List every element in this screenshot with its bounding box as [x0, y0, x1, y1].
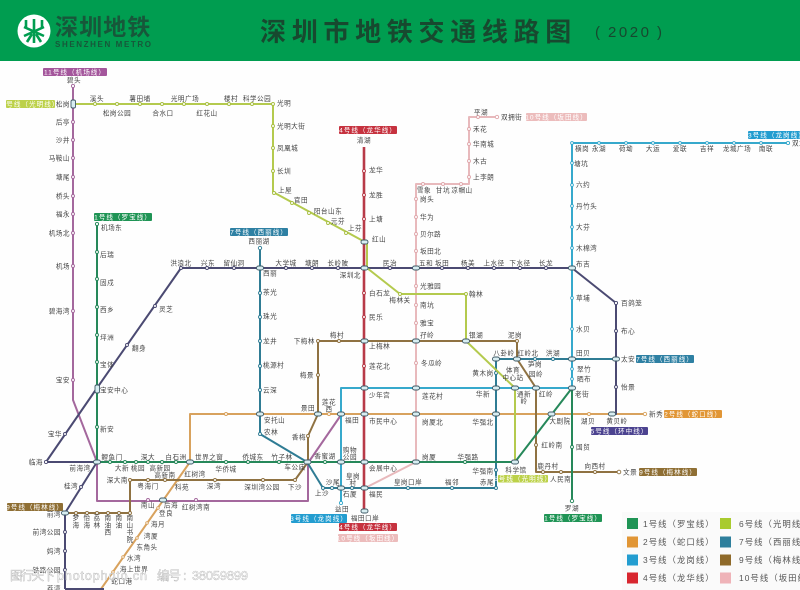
station names: centre: 民乐 [369, 312, 383, 322]
line tag: 11: 11号线（机场线） [44, 68, 106, 76]
line tag: 3 south: 3号线（龙岗线） [290, 514, 348, 523]
station names: east: 布心 [621, 326, 635, 336]
station names: centre: 岗厦 [422, 454, 436, 462]
station names: centre: 白石龙 [369, 288, 390, 298]
station names: centre: 坂田北 [420, 246, 441, 256]
station names: west: 后亭 [56, 118, 70, 126]
station names: centre: 益田 [335, 504, 349, 514]
station names: west: 宝华 [48, 430, 62, 438]
line 1 Luobao [95, 222, 574, 503]
year: 2020 [608, 24, 649, 41]
station names: centre: 西丽 [263, 270, 277, 278]
station names: east: 洪湖 [546, 348, 560, 358]
station names: east: 六约 [576, 180, 590, 189]
station names: west: 翻身 [132, 344, 146, 352]
station names: east: 中心站 [502, 373, 524, 382]
station names: east: 新秀 [649, 410, 663, 418]
line tag: 1: 1号线（罗宝线） [94, 212, 152, 222]
watermark [10, 568, 248, 583]
station names: east: 永湖 [592, 144, 606, 153]
station names: west: 大新 [115, 464, 129, 472]
line tag: 9 west: 9号线（梅林线） [6, 502, 64, 512]
station names: centre: 西 [325, 406, 333, 414]
line tag: 10 south: 10号线（坂田线） [337, 534, 399, 542]
station names: line 6 north: 光明广场 [171, 94, 199, 103]
station names: centre: 上李朗 [473, 172, 494, 182]
line 7 Xili [258, 246, 616, 490]
station names: centre: 华强路 [457, 452, 479, 462]
year: ) [657, 24, 662, 41]
line tag: 4 south: 4号线（龙华线） [339, 522, 397, 532]
station names: west: 梦 [72, 514, 80, 522]
station names: west: 蛇口港 [111, 576, 133, 586]
station names: west: 鲤鱼门 [101, 452, 123, 462]
station names: east: 黄贝岭 [606, 416, 628, 426]
station names: west: 东角头 [136, 542, 158, 552]
station names: east: 泥岗 [508, 332, 522, 340]
station names: centre: 赤尾 [480, 478, 494, 486]
station names: centre: 雪象 [417, 186, 431, 194]
station names: east: 老街 [575, 390, 589, 398]
station names: line 6 north: 光明大街 [277, 122, 305, 130]
station names: line 6 north: 元芬 [331, 216, 345, 226]
station names: centre: 上塘 [369, 214, 383, 224]
station names: west: 南 [104, 513, 112, 522]
station names: east: 八卦岭 [493, 348, 515, 358]
station names: west: 海上世界 [120, 564, 148, 574]
station names: centre: 甘坑 [436, 186, 450, 194]
station names: centre: 农林 [264, 428, 278, 436]
station names: centre: 长岭陂 [327, 258, 349, 268]
station names: line 6 north: 科学公园 [243, 94, 271, 103]
line 9 Meilin [65, 340, 621, 514]
station names: centre: 凉帽山 [451, 186, 473, 194]
station names: west: 前海湾 [69, 464, 91, 472]
line tag: 6 south: 6号线（光明线） [494, 474, 552, 483]
station names: centre: 岗厦北 [422, 418, 443, 426]
station names: centre: 孖岭 [420, 330, 434, 340]
station names: centre: 华强南 [472, 466, 494, 476]
station names: east: 国贸 [576, 442, 590, 452]
station names: line 6 north: 翰林 [469, 290, 483, 298]
station names: east: 人民南 [550, 474, 571, 484]
station names: centre: 双拥街 [501, 112, 522, 122]
station names: west: 临海 [29, 458, 43, 466]
station names: west: 水湾 [127, 554, 141, 562]
station names: east: 向西村 [584, 462, 606, 470]
line tag: 4: 4号线（龙华线） [339, 126, 397, 134]
station names: west: 竹子林 [271, 452, 293, 462]
station names: line 6 north: 阳台山东 [314, 206, 342, 216]
station names: line 6 north: 官田 [294, 196, 308, 204]
line 5 Huanzhong [44, 266, 618, 589]
station names: east: 塘坑 [574, 159, 588, 168]
station names: east: 大芬 [576, 222, 590, 232]
station names: west: 粤海门 [137, 482, 159, 490]
station names: east: 晒布 [577, 374, 591, 384]
station names: line 6 north: 薯田埔 [129, 94, 151, 103]
station names: west: 深圳湾公园 [244, 482, 280, 492]
station names: line 6 north: 溪头 [90, 94, 104, 103]
station names: west: 松岗 [56, 100, 70, 108]
station names: west: 红树湾南 [182, 502, 210, 512]
station names: centre: 华南城 [473, 140, 494, 148]
station names: centre: 云深 [263, 386, 277, 394]
station names: east: 丹竹头 [576, 202, 597, 210]
station names: centre: 下水径 [509, 258, 531, 268]
legend: 1号线（罗宝线） [643, 519, 715, 529]
station names: west: 马鞍山 [49, 154, 70, 162]
station names: west: 湾厦 [144, 532, 158, 540]
station names: west: 海 [72, 520, 80, 529]
station names: west: 宝安中心 [100, 386, 128, 394]
legend: 4号线（龙华线） [643, 573, 715, 583]
station names: centre: 贝尔路 [420, 230, 441, 238]
line tag: 2: 2号线（蛇口线） [664, 410, 722, 418]
station names: west: 坪洲 [100, 334, 114, 342]
station names: west: 塘尾 [56, 172, 70, 182]
station names: centre: 清湖 [357, 136, 371, 144]
legend: 3号线（龙岗线） [643, 555, 715, 565]
watermark: photophoto.cn [57, 569, 147, 583]
station names: west: 机场东 [101, 223, 122, 232]
station names: east: 红岭 [539, 390, 553, 398]
station names: centre: 景田 [301, 404, 315, 412]
station names: west: 固戍 [100, 278, 114, 287]
station names: east: 木棉湾 [576, 244, 597, 252]
station names: west: 新安 [100, 424, 114, 434]
station names: centre: 冬瓜岭 [421, 358, 442, 368]
station names: centre: 车公庙 [284, 462, 306, 472]
station names: east: 大运 [646, 144, 660, 153]
station names: line 6 north: 光明 [277, 98, 291, 108]
station names: west: 油 [104, 520, 112, 529]
line tag: 6: 6号线（光明线） [2, 100, 59, 108]
station names: west [29, 76, 293, 590]
station names: centre: 华新 [476, 390, 490, 398]
station names: line 6 north: 凤凰城 [277, 144, 298, 152]
station names: centre: 福田口岸 [351, 514, 379, 522]
station names: centre: 莲花 [322, 398, 336, 406]
station names: line 6 north [90, 94, 483, 340]
logo wordmark: SHENZHEN METRO [55, 40, 151, 49]
station names: west: 院 [126, 535, 134, 544]
station names: centre: 福民 [369, 490, 383, 498]
station names: line 6 north: 上屋 [278, 186, 292, 194]
station names: west: 桃园 [131, 464, 145, 472]
header banner [0, 0, 800, 61]
station names: west: 前湾 [47, 510, 61, 518]
station names: east: 岭 [520, 396, 528, 406]
station names: centre: 下梅林 [294, 336, 315, 346]
station names: west: 南 [126, 513, 134, 522]
station names: centre: 洪浪北 [170, 258, 192, 268]
station names: centre: 华为 [420, 212, 434, 222]
station names: west: 科苑 [175, 482, 189, 492]
station names: line 6 north: 红山 [372, 234, 386, 244]
station names: east: 太安 [621, 354, 635, 364]
station names: west: 沙井 [56, 136, 70, 144]
station names: centre: 沙尾 [326, 478, 340, 486]
station names: centre: 西丽湖 [248, 236, 270, 246]
station names: centre: 上水径 [483, 258, 505, 268]
station names: west: 海月 [151, 520, 165, 528]
station names: centre: 桃源村 [263, 360, 284, 370]
station names: east: 通新 [517, 390, 531, 398]
watermark: : [183, 569, 186, 583]
station names: line 6 north: 楼村 [224, 94, 238, 103]
station names: east: 田贝 [576, 350, 590, 358]
station names: centre: 少年宫 [369, 390, 390, 400]
line 3 Longgang [339, 141, 790, 505]
station names: centre: 岗头 [420, 194, 434, 204]
station names: east: 湖贝 [581, 416, 595, 426]
station names: west: 福永 [56, 210, 70, 218]
logo wordmark: 深圳地铁 [55, 14, 151, 40]
station names: east: 水贝 [576, 324, 590, 334]
station names: centre: 华强北 [472, 418, 494, 426]
line tag: 7: 7号线（西丽线） [230, 228, 288, 236]
station names: line 6 north: 长圳 [277, 166, 291, 176]
station names: west: 桥头 [56, 192, 70, 200]
station names: line 6 north: 松岗公园 [103, 108, 131, 118]
station names: centre: 雅宝 [420, 318, 434, 328]
station names: west: 机场北 [49, 228, 70, 238]
station names: west: 侨城东 [242, 452, 264, 462]
station names: west: 碧头 [67, 76, 81, 84]
station names: centre: 光雅园 [420, 282, 441, 290]
station names: west: 高新南 [154, 470, 176, 480]
station names: west: 深大 [141, 452, 155, 462]
station names: centre: 莲花北 [369, 362, 390, 370]
line 10 Bantian [365, 115, 499, 488]
station names: centre: 香梅 [292, 432, 306, 442]
line tag: 9 east: 9号线（梅林线） [639, 468, 697, 476]
station names: centre: 木古 [473, 156, 487, 166]
station names: west: 南 [115, 513, 123, 522]
legend [622, 512, 800, 590]
station names: centre: 留仙洞 [223, 258, 245, 268]
watermark: 图行天下 [10, 569, 55, 583]
station names: east: 龙城广场 [723, 144, 751, 153]
watermark: 38059899 [192, 569, 248, 583]
station names: east: 吉祥 [700, 144, 714, 153]
station names: west: 林 [93, 520, 101, 529]
station names: west: 前湾公园 [33, 528, 61, 536]
station names: line 6 north: 合水口 [152, 108, 174, 118]
station names: centre: 长龙 [539, 258, 553, 268]
station names: west: 登良 [159, 508, 173, 518]
station names: west: 白石洲 [165, 452, 187, 462]
station names: east: 横岗 [575, 144, 589, 153]
station names: east: 翠竹 [577, 364, 591, 374]
station names: centre: 安托山 [264, 416, 285, 424]
station names: west: 后瑞 [100, 250, 114, 259]
station names: centre: 珠光 [263, 312, 277, 320]
station names: centre: 杨美 [461, 258, 475, 268]
station names: centre: 香蜜湖 [314, 452, 336, 460]
station names: west: 宝安 [56, 376, 70, 384]
station names: line 6 north: 梅林关 [389, 296, 411, 304]
line 4 Longhua [362, 147, 366, 511]
station names: east: 百鸽笼 [621, 298, 642, 308]
station names: east: 园岭 [529, 370, 543, 378]
station names: east: 鹿丹村 [537, 462, 559, 470]
station names: centre: 村 [349, 478, 357, 488]
station names: east: 体育 [506, 366, 520, 374]
station names: centre: 福邻 [445, 478, 459, 486]
station names: west: 深大南 [107, 476, 128, 484]
station names: west: 世界之窗 [195, 452, 223, 462]
watermark: 编号 [157, 568, 181, 583]
station names: centre: 大学城 [275, 258, 297, 268]
station names: west: 灵芝 [159, 304, 173, 314]
line 6 Guangming [73, 102, 515, 462]
station names: centre: 禾花 [473, 124, 487, 134]
station names: west: 深湾 [207, 482, 221, 490]
station names: east: 怡景 [621, 382, 635, 392]
station names: centre: 茶光 [263, 288, 277, 296]
station names: centre: 平湖 [474, 108, 488, 116]
station names: west: 怡 [83, 513, 91, 522]
station names: west: 红树湾 [184, 470, 206, 478]
station names: east: 笋岗 [528, 360, 542, 368]
station names: west: 山 [126, 520, 134, 529]
station names: east: 爱联 [673, 144, 687, 153]
station names: west: 后海 [164, 500, 178, 510]
station names: centre: 会展中心 [369, 464, 397, 472]
station names: east [493, 138, 800, 512]
station names: west: 海 [83, 520, 91, 529]
line tag: 5: 5号线（环中线） [591, 426, 648, 436]
station names: centre: 公园 [343, 454, 357, 462]
station names: east: 大剧院 [549, 416, 571, 426]
icon: metro logo [18, 14, 50, 48]
line 2 Shekou [101, 412, 647, 589]
station names: west: 桂湾 [64, 482, 78, 490]
station names: west: 妈湾 [47, 546, 61, 556]
station names: west: 油 [115, 520, 123, 529]
station names: east: 红岭南 [541, 440, 563, 450]
line 11 Airport [71, 84, 341, 502]
station names: centre: 皇岗 [346, 472, 360, 480]
station names: line 6 north: 红花山 [196, 108, 218, 118]
station names: centre: 深圳北 [340, 270, 361, 280]
station names: west: 书 [126, 528, 134, 537]
station names: centre: 兴东 [201, 258, 215, 268]
station names: west: 铁路公园 [33, 566, 61, 574]
station names: centre: 黄木岗 [472, 368, 494, 378]
station names: west: 西 [104, 529, 112, 537]
station names: centre: 上沙 [315, 488, 329, 498]
station names: west: 机场 [56, 262, 70, 270]
station names: centre: 福田 [345, 416, 359, 424]
title: 深圳市地铁交通线路图 [260, 17, 577, 47]
station names: centre: 南坑 [420, 300, 434, 310]
station names: centre: 皇岗口岸 [394, 478, 422, 486]
station names: east: 南联 [759, 144, 773, 153]
station names: centre: 民治 [383, 258, 397, 268]
year [595, 24, 662, 41]
station names: centre: 市民中心 [369, 416, 397, 426]
station names: west: 宝体 [100, 360, 114, 369]
station names: centre: 莲花村 [422, 392, 443, 400]
station names: centre: 购物 [343, 446, 357, 454]
station names: centre: 坂田 [435, 258, 449, 268]
station names: centre: 梅村 [330, 330, 344, 340]
station names: west: 高新园 [149, 464, 171, 472]
station names: east: 文景 [623, 468, 637, 476]
station names: west: 南山 [141, 500, 155, 510]
station names: east: 红岭北 [517, 348, 539, 358]
station names: east: 布吉 [576, 260, 590, 268]
interchange stations [62, 100, 620, 515]
station names: west: 西乡 [100, 306, 114, 314]
station names: centre: 上梅林 [369, 342, 390, 350]
station names: centre: 龙胜 [369, 190, 383, 200]
station names: centre: 科学馆 [505, 466, 527, 474]
station names: east: 草埔 [576, 294, 590, 302]
line tag: 7 east: 7号线（西丽线） [636, 354, 694, 364]
station names: centre: 下沙 [288, 484, 302, 492]
station names: centre: 石厦 [343, 490, 357, 498]
station names: line 6 north: 银湖 [469, 330, 483, 340]
station names: centre [170, 108, 553, 522]
station names: line 6 north: 上芬 [348, 224, 362, 232]
line tag: 1 south: 1号线（罗宝线） [544, 514, 602, 522]
station names: centre: 龙井 [263, 336, 277, 346]
year: ( [595, 24, 600, 41]
station names: centre: 五和 [419, 258, 433, 268]
station names: centre: 塘朗 [305, 258, 319, 268]
station names: centre: 梅景 [300, 370, 314, 380]
station names: east: 荷坳 [619, 144, 633, 153]
line tag: 10: 10号线（坂田线） [525, 112, 588, 122]
station names: east: 罗湖 [565, 504, 579, 512]
station names: west: 荔 [93, 513, 101, 522]
station names: west: 华侨城 [215, 464, 237, 474]
station names: centre: 龙华 [369, 166, 383, 174]
station names: west: 碧海湾 [49, 306, 70, 316]
legend: 2号线（蛇口线） [643, 537, 715, 547]
